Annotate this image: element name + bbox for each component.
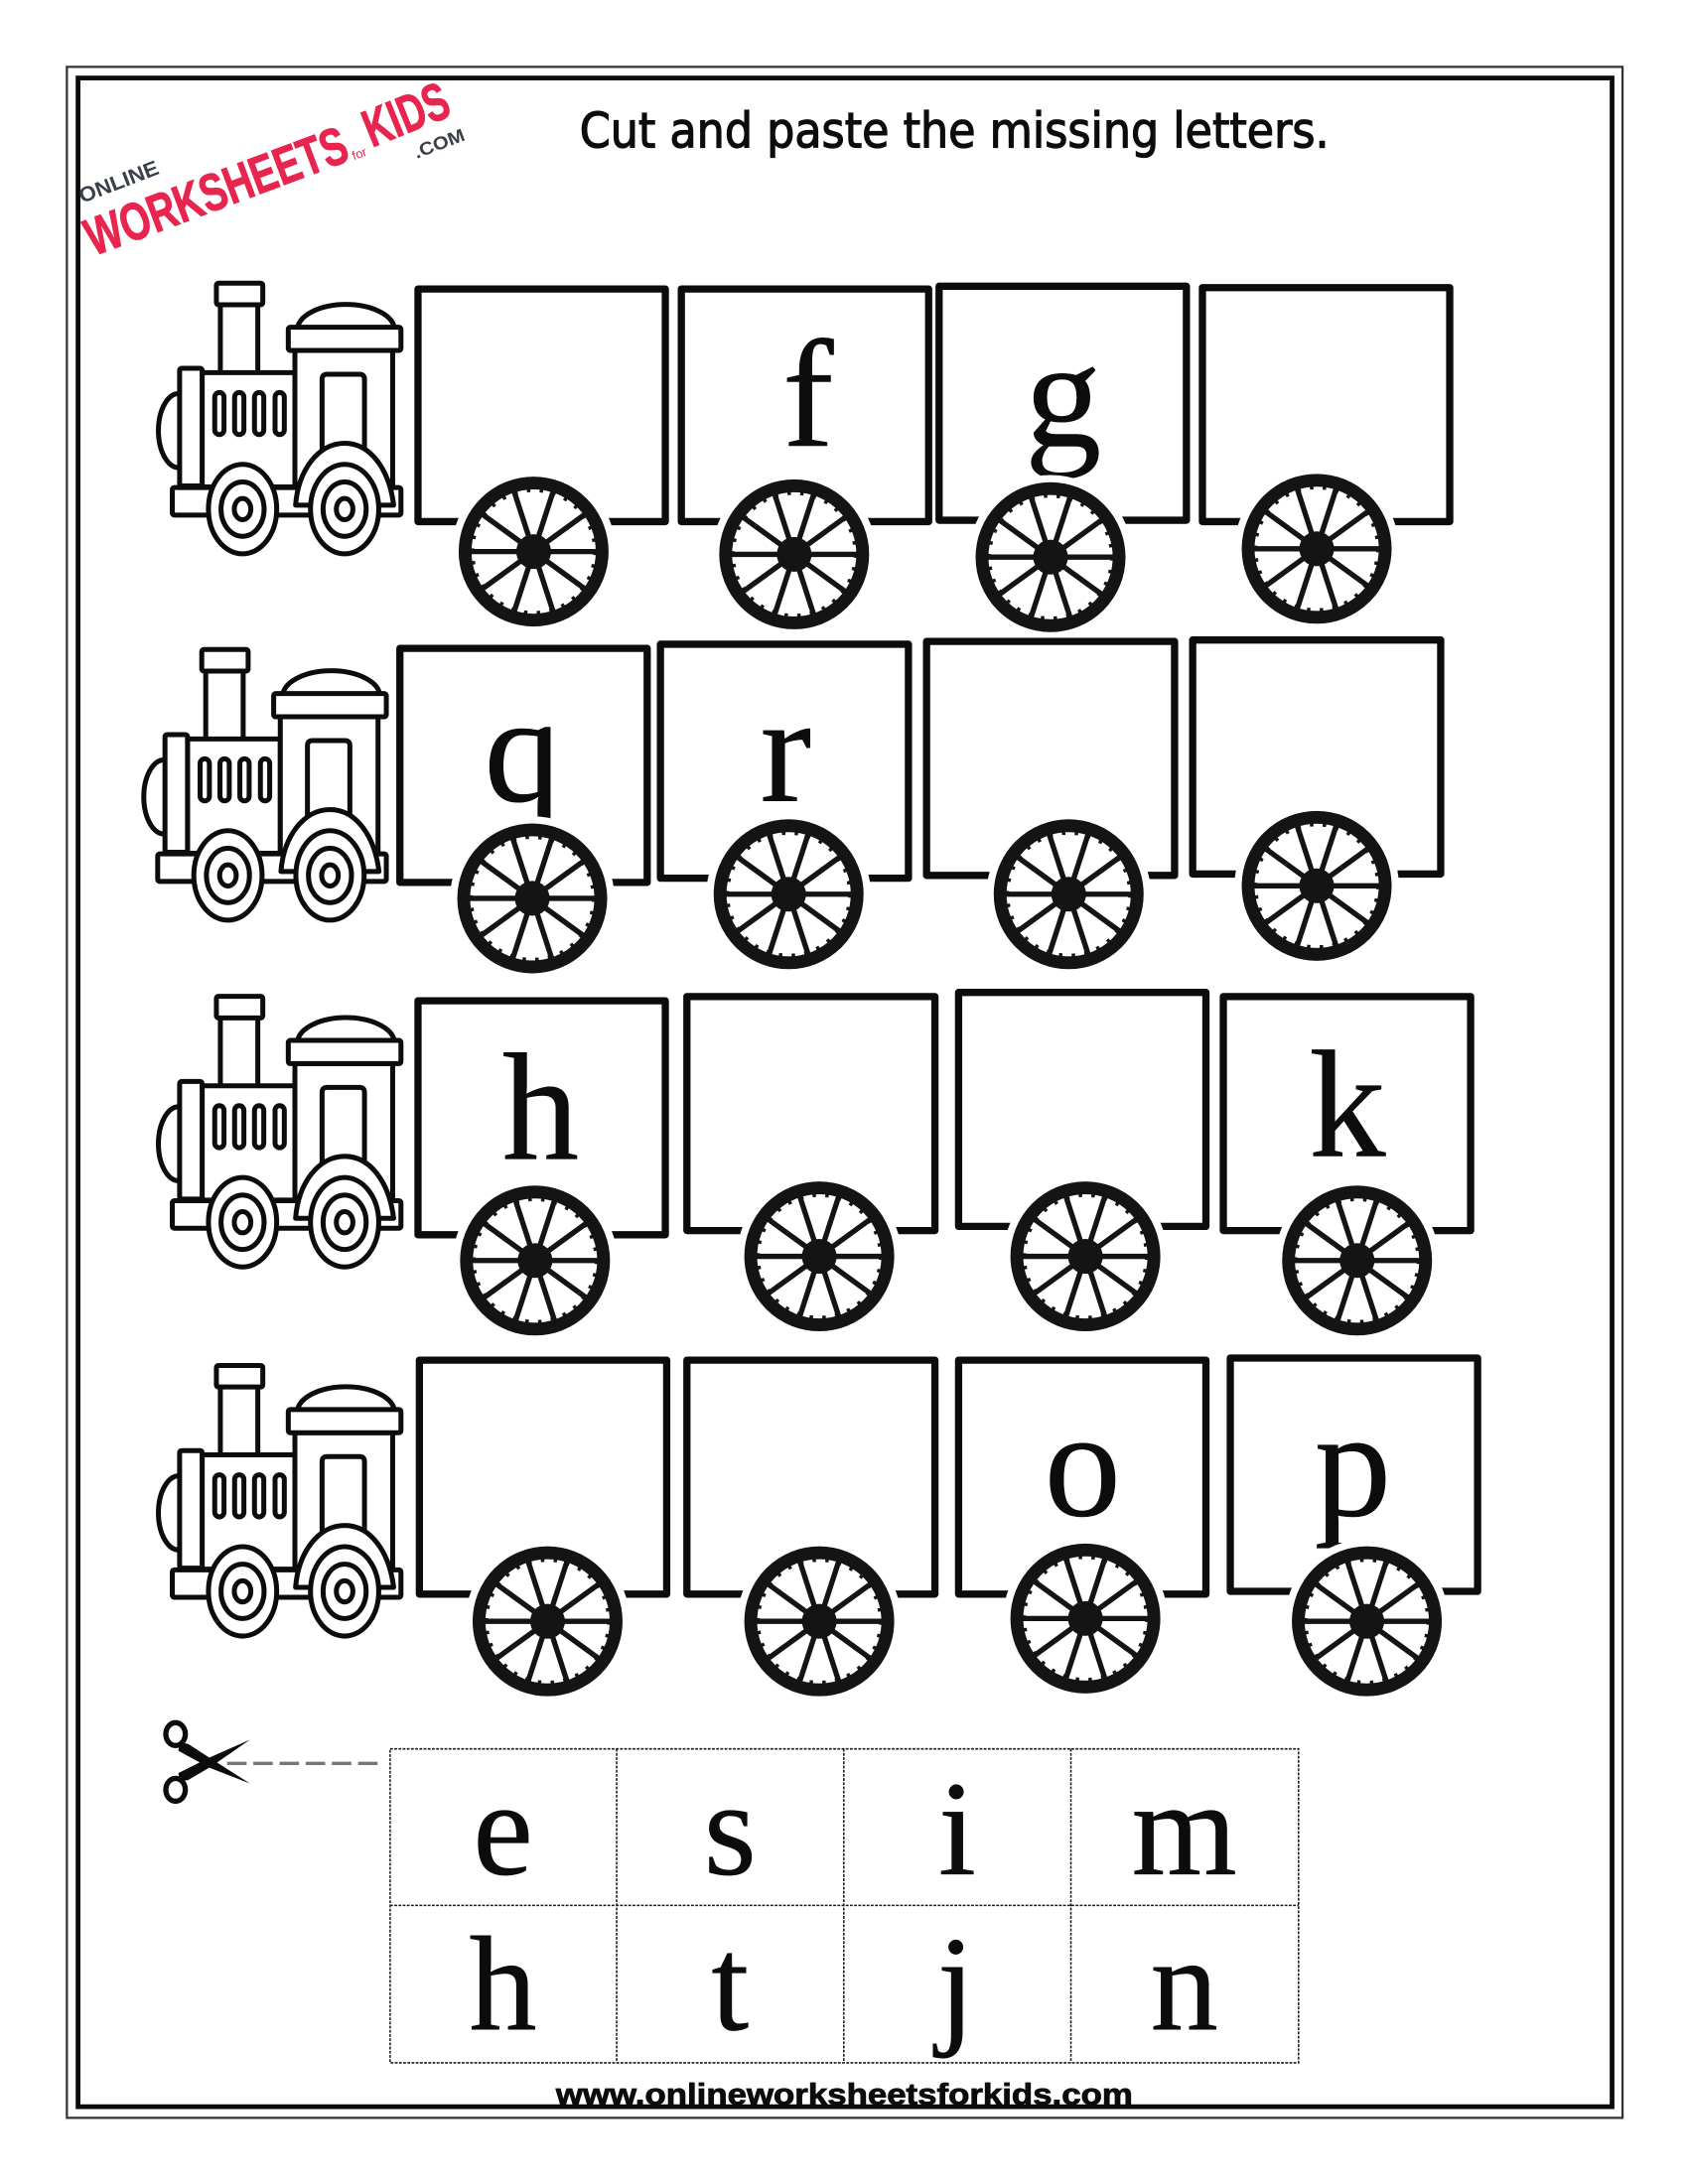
wheel 3-4 <box>1275 1178 1440 1343</box>
letter p: p <box>1315 1380 1391 1550</box>
letter k: k <box>1309 1021 1386 1190</box>
wagon 2-2 <box>660 644 909 879</box>
letter f: f <box>782 310 834 479</box>
letter o: o <box>1045 1380 1121 1550</box>
wheel 4-1 <box>466 1539 630 1704</box>
logo word: com: .COM <box>410 124 468 163</box>
wagon 3-2 <box>687 997 935 1231</box>
wagon 4-3 <box>958 1360 1205 1594</box>
icon: scissors <box>166 1722 250 1801</box>
letter r: r <box>761 665 811 835</box>
train row 2 <box>144 640 1441 981</box>
logo word: kids: KIDS <box>354 71 458 159</box>
wheel 2-3 <box>986 812 1151 977</box>
wagon 4-1 <box>419 1360 666 1594</box>
cut letter j: j <box>933 1910 975 2059</box>
logo: online worksheets for kids <box>75 71 468 267</box>
wheel 4-3 <box>1003 1537 1168 1701</box>
wagon 1-4 <box>1202 288 1450 521</box>
wagon 3-3 <box>958 993 1205 1226</box>
locomotive 2 <box>144 649 386 920</box>
wheel 4-4 <box>1285 1539 1449 1704</box>
cut line <box>227 1762 380 1764</box>
wagon 4-4 <box>1230 1358 1477 1591</box>
locomotive 1 <box>159 283 401 554</box>
wagon 1-1 <box>418 289 665 521</box>
wheel 2-2 <box>706 812 871 977</box>
wheel 1-2 <box>712 473 877 636</box>
wagon 2-4 <box>1193 640 1441 874</box>
footer url: www.onlineworksheetsforkids.com <box>555 2077 1133 2112</box>
letter g: g <box>1025 310 1101 479</box>
cut-out letter grid <box>390 1749 1299 2063</box>
train row 3 <box>159 993 1471 1343</box>
train row 4 <box>159 1358 1477 1704</box>
logo word: online: ONLINE <box>75 157 162 208</box>
wagon 4-2 <box>687 1360 935 1594</box>
wheel 1-4 <box>1234 467 1399 631</box>
locomotive 4 <box>159 1365 401 1636</box>
wheel 2-4 <box>1234 804 1399 968</box>
cut letter e: e <box>473 1755 533 1904</box>
wheel 3-3 <box>1003 1174 1168 1338</box>
locomotive 3 <box>159 997 401 1267</box>
cut letter i: i <box>938 1755 976 1904</box>
wagon 1-3 <box>939 286 1187 520</box>
wagon 2-1 <box>400 648 647 883</box>
train row 1 <box>159 283 1450 639</box>
wheel 1-1 <box>452 470 616 633</box>
wagon 3-1 <box>418 1001 665 1235</box>
logo word: for: for <box>351 145 368 163</box>
cut letter h: h <box>470 1910 537 2059</box>
wheel 2-1 <box>450 816 615 981</box>
title: Cut and paste the missing letters. <box>580 102 1330 160</box>
wagon 2-3 <box>926 641 1175 876</box>
wagon 3-4 <box>1223 997 1471 1231</box>
wheel 1-3 <box>968 475 1133 639</box>
letter q: q <box>485 665 561 835</box>
wheel 3-2 <box>737 1174 902 1338</box>
cut letter m: m <box>1132 1755 1237 1904</box>
wheel 4-2 <box>737 1539 902 1704</box>
cut letter s: s <box>704 1755 757 1904</box>
cut letter n: n <box>1151 1910 1218 2059</box>
logo word: worksheets: WORKSHEETS <box>77 116 355 267</box>
letter h: h <box>502 1023 579 1192</box>
wheel 3-1 <box>453 1178 618 1343</box>
wagon 1-2 <box>681 289 928 521</box>
cut letter t: t <box>711 1910 749 2059</box>
